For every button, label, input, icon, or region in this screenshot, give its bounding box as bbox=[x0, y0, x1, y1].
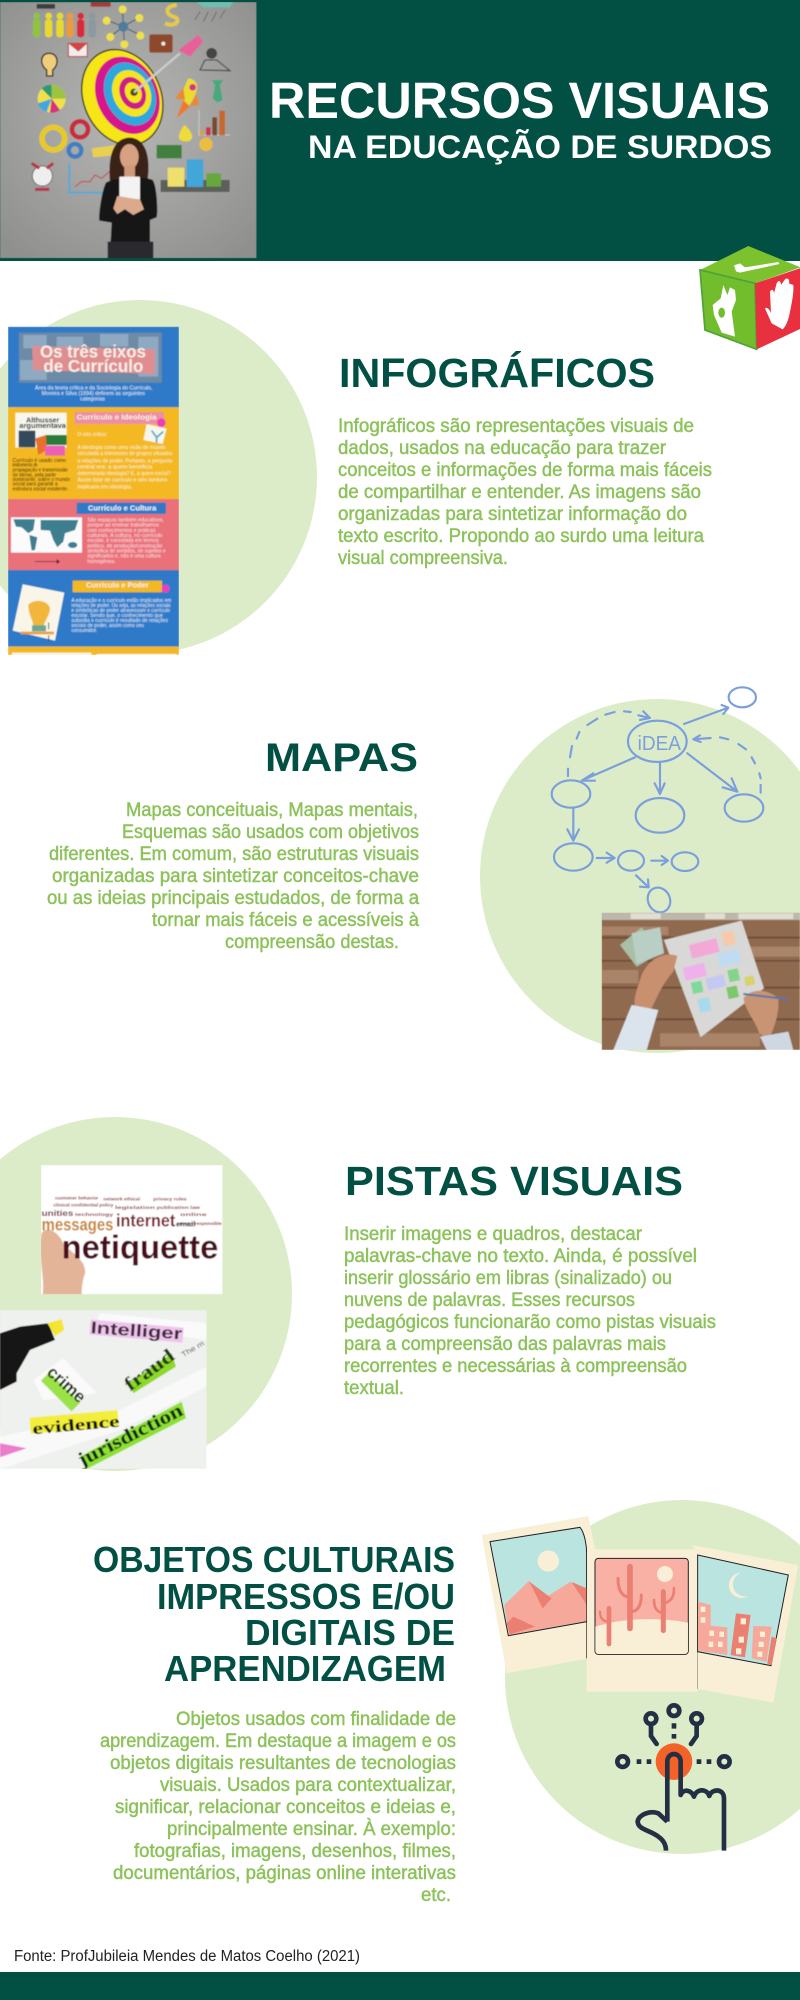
body text: etc. bbox=[421, 1885, 451, 1906]
body text: conceitos e informações de forma mais fáceis bbox=[338, 460, 712, 481]
heading: PISTAS VISUAIS bbox=[345, 1158, 683, 1204]
infographic thumbnail: Currículo e Poder bbox=[86, 582, 149, 589]
infographic thumbnail: vinculada a interesses de grupos situados bbox=[77, 451, 173, 457]
body text bbox=[100, 1709, 456, 1906]
body text: Infográficos são representações visuais de bbox=[338, 416, 694, 437]
body text: textual. bbox=[344, 1378, 404, 1399]
panel: infográficos bbox=[0, 300, 712, 655]
body text: significar, relacionar conceitos e ideias e, bbox=[115, 1797, 456, 1818]
infographic thumbnail: e simbólicas de poder atravessam o currículo bbox=[71, 608, 170, 614]
photo: highlighted keywords: fraud bbox=[121, 1345, 179, 1396]
main title: RECURSOS VISUAIS bbox=[269, 72, 770, 129]
body text: organizadas para sintetizar informação do bbox=[338, 504, 687, 525]
circle background bbox=[505, 1500, 800, 1854]
infographic thumbnail: social para garantir a bbox=[13, 482, 58, 488]
circle background bbox=[480, 699, 800, 1053]
infographic thumbnail: culturais. A cultura, no currículo bbox=[87, 533, 162, 539]
body text: compreensão destas. bbox=[225, 932, 399, 953]
heading: INFOGRÁFICOS bbox=[339, 350, 655, 396]
infographic thumbnail bbox=[8, 327, 179, 655]
body text bbox=[338, 416, 712, 569]
heading bbox=[93, 1539, 455, 1689]
infographic thumbnail: categorias bbox=[80, 396, 105, 402]
infographic thumbnail: argumentava bbox=[19, 421, 67, 430]
source credit: Fonte: ProfJubileia Mendes de Matos Coelho (2021) bbox=[14, 1948, 360, 1965]
body text: objetos digitais resultantes de tecnologias bbox=[110, 1753, 456, 1774]
heading: MAPAS bbox=[265, 736, 418, 780]
infographic thumbnail: O viés crítico: bbox=[77, 432, 107, 438]
infographic thumbnail: de ideias, pela parte bbox=[13, 472, 56, 478]
body text: diferentes. Em comum, são estruturas visuais bbox=[49, 844, 419, 865]
photo: netiquette word cloud: email bbox=[176, 1220, 195, 1229]
icon: hand touching digital node bbox=[617, 1705, 730, 1851]
body text: para a compreensão das palavras mais bbox=[344, 1334, 666, 1355]
photo: netiquette word cloud: internet bbox=[116, 1211, 176, 1231]
body text: dados, usados na educação para trazer bbox=[338, 438, 667, 459]
infographic thumbnail: significados e, não é uma cultura bbox=[87, 554, 161, 560]
illustration: three polaroid photos bbox=[482, 1516, 798, 1703]
infographic thumbnail: consumidor. bbox=[71, 628, 97, 634]
infographic thumbnail: porque ao ensinar trabalhamos bbox=[87, 523, 159, 529]
body text: organizadas para sintetizar conceitos-chave bbox=[52, 866, 419, 887]
body text: visual compreensiva. bbox=[338, 548, 508, 569]
body text: texto escrito. Propondo ao surdo uma leitura bbox=[338, 526, 704, 547]
heading: IMPRESSOS E/OU bbox=[157, 1576, 455, 1617]
infographic thumbnail: subsidia o currículo é resultado de relações bbox=[71, 618, 168, 624]
photo: netiquette word cloud: legislation bbox=[115, 1205, 156, 1210]
body text bbox=[47, 800, 419, 953]
infographic thumbnail: político, de produção/construção bbox=[87, 543, 162, 549]
infographic thumbnail: propagação e transmissão bbox=[13, 467, 68, 473]
heading: DIGITAIS DE bbox=[245, 1612, 455, 1653]
photo: highlighted keywords: Intelliger bbox=[90, 1318, 183, 1343]
infographic thumbnail: central era: a quem beneficia bbox=[77, 464, 152, 470]
infographic thumbnail: Althusser bbox=[26, 415, 59, 424]
photo: highlighted keywords: jurisdiction bbox=[73, 1400, 187, 1472]
photo: netiquette word cloud: technology bbox=[75, 1212, 114, 1217]
body text: visuais. Usados para contextualizar, bbox=[160, 1775, 456, 1796]
body text: fotografias, imagens, desenhos, filmes, bbox=[134, 1841, 456, 1862]
infographic thumbnail: implicaria em ideologia. bbox=[77, 484, 132, 490]
subtitle: NA EDUCAÇÃO DE SURDOS bbox=[308, 128, 772, 165]
infographic thumbnail: São espaços também educativos, bbox=[87, 517, 164, 523]
photo: netiquette word cloud: publication law bbox=[157, 1205, 201, 1210]
infographic thumbnail: Currículo e Cultura bbox=[88, 505, 156, 512]
body text: Mapas conceituais, Mapas mentais, bbox=[126, 800, 418, 821]
infographic thumbnail: A educação e o currículo estão implicados em bbox=[71, 598, 172, 604]
infographic thumbnail: A ideologia como uma visão de mundo bbox=[77, 445, 166, 451]
panel: pistas visuais bbox=[0, 1117, 716, 1472]
photo: highlighted keywords: The m bbox=[180, 1339, 206, 1359]
body text: documentários, páginas online interativas bbox=[113, 1863, 456, 1884]
infographic thumbnail: homogênea. bbox=[87, 559, 116, 565]
photo: hands drawing a diagram on paper bbox=[602, 913, 800, 1050]
body text: aprendizagem. Em destaque a imagem e os bbox=[100, 1731, 456, 1752]
body text: recorrentes e necessárias à compreensão bbox=[344, 1356, 687, 1377]
infographic thumbnail: dominante, sobre o mundo bbox=[13, 477, 70, 483]
body text: pedagógicos funcionarão como pistas visuais bbox=[344, 1312, 716, 1333]
body text: de compartilhar e entender. As imagens são bbox=[338, 482, 701, 503]
infographic thumbnail: escolar. Sendo que, o conhecimento que bbox=[71, 613, 163, 619]
infographic thumbnail: Área da teoria crítica e da Sociologia do Currículo, bbox=[35, 384, 152, 391]
concept map doodle bbox=[552, 687, 763, 916]
photo: netiquette word cloud: privacy responsible bbox=[177, 1221, 222, 1226]
body text: ou as ideias principais estudados, de forma a bbox=[47, 888, 419, 909]
infographic thumbnail: Os três eixos bbox=[40, 341, 146, 361]
photo: netiquette word cloud: clinical confidential policy bbox=[53, 1203, 114, 1208]
body text: principalmente ensinar. À exemplo: bbox=[167, 1819, 456, 1840]
infographic thumbnail: com conhecimentos e práticas bbox=[87, 528, 156, 534]
header photo: woman and colourful target doodles bbox=[0, 2, 257, 258]
infographic thumbnail: simbólica de sentidos, de sujeitos e bbox=[87, 548, 166, 554]
infographic thumbnail: Moreira e Silva (1994) definem as seguintes bbox=[42, 391, 145, 397]
panel: objetos culturais bbox=[93, 1500, 800, 1906]
icon: sign language cube bbox=[700, 246, 800, 349]
photo: netiquette word cloud: privacy rules bbox=[153, 1197, 187, 1202]
circle background bbox=[0, 1117, 292, 1471]
photo: netiquette word cloud: customer behavior bbox=[55, 1195, 99, 1200]
infographic thumbnail: de Currículo bbox=[43, 356, 143, 376]
photo: netiquette word cloud: messages bbox=[42, 1215, 113, 1235]
infographic thumbnail: Currículo é usado como bbox=[13, 458, 66, 464]
photo: highlighted keywords bbox=[0, 1310, 207, 1472]
body text: inserir glossário em libras (sinalizado) ou bbox=[344, 1268, 672, 1289]
photo: netiquette word cloud: unities bbox=[42, 1209, 74, 1218]
panel: mapas bbox=[47, 687, 800, 1053]
infographic thumbnail: escolar, é concebida em termos bbox=[87, 538, 159, 544]
infographic thumbnail: instrumento de bbox=[13, 463, 38, 469]
body text: Objetos usados com finalidade de bbox=[176, 1709, 456, 1730]
body text: tornar mais fáceis e acessíveis à bbox=[152, 910, 419, 931]
body text: Esquemas são usados com objetivos bbox=[122, 822, 419, 843]
photo: netiquette word cloud bbox=[41, 1165, 223, 1294]
heading: OBJETOS CULTURAIS bbox=[93, 1539, 455, 1580]
heading: APRENDIZAGEM bbox=[164, 1648, 446, 1689]
photo: highlighted keywords: evidence bbox=[32, 1412, 120, 1438]
infographic thumbnail: relações de poder. Ou seja, as relações sociais bbox=[71, 603, 171, 609]
photo: netiquette word cloud: netiquette bbox=[62, 1229, 218, 1266]
photo: highlighted keywords: crime bbox=[43, 1362, 90, 1407]
body text bbox=[344, 1224, 716, 1399]
circle background bbox=[0, 300, 317, 654]
infographic thumbnail: Currículo e Ideologia bbox=[77, 412, 157, 421]
body text: palavras-chave no texto. Ainda, é possível bbox=[344, 1246, 697, 1267]
footer band bbox=[0, 1972, 800, 2000]
body text: Inserir imagens e quadros, destacar bbox=[344, 1224, 643, 1245]
infographic thumbnail: sociais de poder, assim como seu bbox=[71, 623, 144, 629]
concept map doodle: iDEA bbox=[638, 733, 682, 755]
infographic thumbnail: determinada ideologia? E, a quem exclui? bbox=[77, 471, 171, 477]
body text: nuvens de palavras. Esses recursos bbox=[344, 1290, 635, 1311]
infographic thumbnail: estrutura social existente. bbox=[13, 487, 68, 493]
header band bbox=[0, 0, 800, 261]
photo: netiquette word cloud: online bbox=[180, 1212, 208, 1217]
infographic thumbnail: a relações de poder. Portanto, a pergunta bbox=[77, 458, 172, 464]
photo: netiquette word cloud: network ethical bbox=[103, 1197, 140, 1202]
infographic thumbnail: Assim falar de currículo e viés também bbox=[77, 477, 168, 483]
